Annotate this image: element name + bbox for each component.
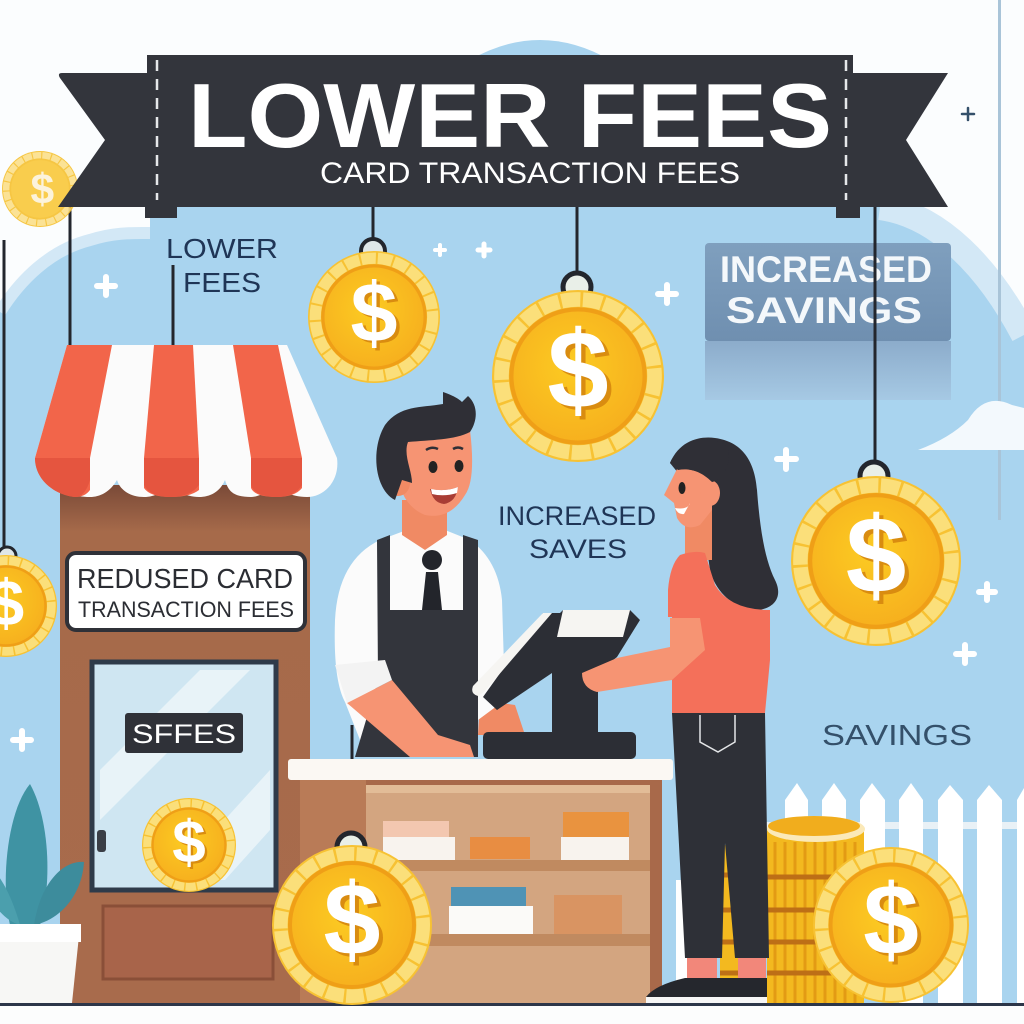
panel: increased savings: SAVINGS (726, 290, 922, 331)
cuff (335, 660, 392, 703)
coin: in window (142, 798, 236, 892)
coin: left edge (0, 547, 57, 657)
banner (58, 55, 948, 218)
fringe (670, 439, 729, 482)
counter (288, 759, 673, 1003)
hanging strings (4, 205, 577, 835)
coin: top left: $ (30, 165, 54, 213)
coin: right: $ (850, 499, 911, 620)
coin: upper centre left (308, 239, 440, 383)
neck (402, 500, 447, 550)
banner tails (58, 73, 150, 207)
panel: increased savings: INCREASED (720, 249, 932, 290)
label: lower fees: FEES (183, 267, 261, 298)
back arm (478, 700, 525, 735)
coin stack (720, 816, 865, 1003)
coin: right: $ (846, 495, 906, 616)
coin: bottom centre: $ (324, 862, 380, 977)
coin: bottom right: $ (863, 865, 919, 976)
arm (582, 618, 705, 692)
label: savings: SAVINGS (822, 720, 972, 752)
sign: reduced card transaction fees: TRANSACTION FEES (78, 597, 294, 622)
shop window: SFFES (132, 719, 236, 749)
top (668, 552, 770, 713)
sparkles (13, 108, 995, 749)
subtitle: CARD TRANSACTION FEES (320, 157, 740, 190)
label: increased saves: SAVES (529, 534, 627, 564)
coin: upper centre left: $ (354, 268, 401, 362)
coin: bottom centre (272, 833, 432, 1005)
apron (355, 535, 478, 757)
sign: reduced card transaction fees: REDUSED CARD (77, 563, 293, 594)
door panel (103, 906, 273, 979)
panel: increased savings (705, 243, 951, 400)
tie (422, 550, 442, 610)
coin: bottom right: $ (867, 868, 923, 979)
shop window (92, 662, 276, 890)
shoes (646, 978, 767, 997)
hair (376, 392, 476, 500)
shelf items (383, 821, 449, 837)
man (335, 392, 525, 757)
fence (676, 783, 1024, 1003)
cloud (918, 401, 1024, 450)
shop building (60, 485, 310, 1003)
coin: upper centre left: $ (351, 265, 397, 359)
string: right coin (874, 207, 876, 462)
coin: in window: $ (172, 808, 206, 875)
coin: upper centre: $ (547, 309, 609, 432)
face (664, 467, 712, 527)
face (397, 430, 472, 516)
neck (685, 510, 712, 560)
label: lower fees (166, 233, 278, 298)
woman (582, 438, 778, 1003)
coin: top left (2, 151, 78, 227)
coin: upper centre (492, 273, 664, 462)
plant (0, 784, 84, 1003)
awning (35, 345, 337, 497)
cash register (472, 610, 640, 759)
sign: reduced card transaction fees (67, 553, 305, 630)
coin: bottom right (813, 847, 969, 1003)
ear (386, 470, 410, 496)
label: lower fees: LOWER (166, 233, 278, 264)
label: increased saves (498, 501, 656, 564)
title: LOWER FEES (188, 66, 832, 167)
trousers (672, 713, 769, 958)
arm (347, 680, 474, 757)
hair back (670, 438, 778, 610)
coin: in window: $ (175, 810, 208, 877)
coin: upper centre: $ (552, 312, 613, 435)
label: increased saves: INCREASED (498, 501, 656, 531)
coin: right (791, 462, 961, 646)
face details (428, 461, 438, 473)
shirt (335, 528, 505, 740)
coin: bottom centre: $ (328, 865, 384, 980)
ankles (687, 958, 766, 980)
